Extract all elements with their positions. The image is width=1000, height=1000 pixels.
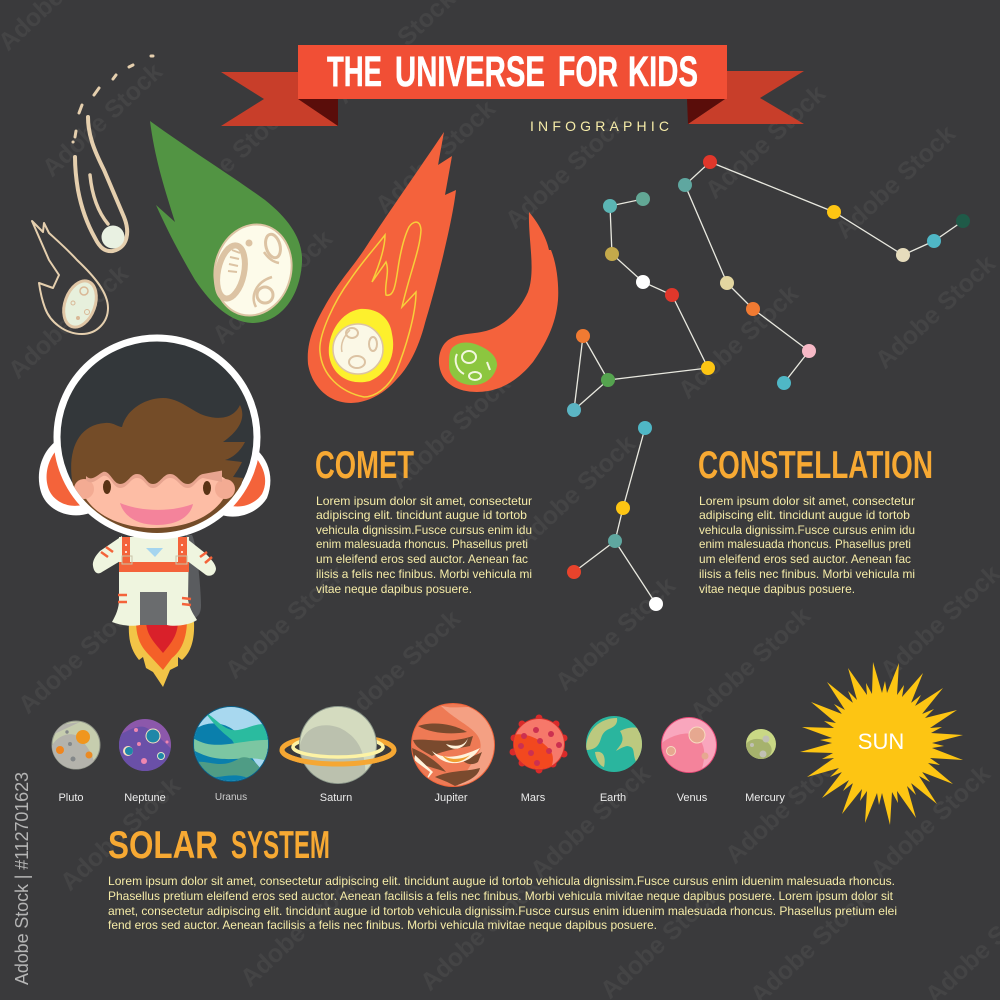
text: Adobe Stock xyxy=(550,572,681,696)
helmet xyxy=(57,338,257,536)
text: Adobe Stock xyxy=(37,58,168,182)
text block: comet: enim malesuada rhoncus. Phasellus preti xyxy=(316,537,528,551)
icon: sun xyxy=(800,662,963,825)
planet labels xyxy=(58,792,785,804)
title: FOR xyxy=(558,48,618,96)
text block: comet: adipiscing elit. tincidunt augue id tortob xyxy=(316,508,527,522)
text block: comet: vitae neque dapibus posuere. xyxy=(316,582,472,596)
text: Adobe Stock xyxy=(3,260,134,384)
heading: solar system: SOLAR xyxy=(108,824,218,867)
text block: constellation: ilisis a felis nec finibus. Morbi vehicula mi xyxy=(699,567,915,581)
text block: solar system xyxy=(108,874,897,932)
text: Adobe Stock xyxy=(55,772,186,896)
icon: big orange comet xyxy=(308,132,456,403)
title: UNIVERSE xyxy=(395,48,545,96)
head xyxy=(71,398,245,534)
planet labels: Earth xyxy=(600,792,626,804)
icon: curved orange comet xyxy=(439,212,558,392)
flame xyxy=(129,620,194,687)
text block: comet: ilisis a felis nec finibus. Morbi vehicula mi xyxy=(316,567,532,581)
planet labels: Mars xyxy=(521,792,546,804)
planet: Venus xyxy=(660,717,717,775)
text block: constellation: vehicula dignissim.Fusce cursus enim idu xyxy=(699,523,915,537)
text: Adobe Stock xyxy=(720,745,851,869)
text: Adobe Stock xyxy=(500,110,631,234)
planet: Mars xyxy=(510,714,568,775)
planet labels: Pluto xyxy=(58,792,84,804)
text: Adobe Stock xyxy=(220,560,351,684)
planet labels: Saturn xyxy=(320,792,352,804)
watermark credit: Adobe Stock | #112701623 xyxy=(12,772,32,985)
text: Adobe Stock xyxy=(685,602,816,726)
planet: Neptune xyxy=(119,719,172,775)
text: Adobe Stock xyxy=(700,80,831,204)
text: Adobe Stock xyxy=(335,605,466,729)
text: Adobe Stock xyxy=(13,595,144,719)
astronaut kid xyxy=(39,338,270,687)
text block: solar system: Lorem ipsum dolor sit amet, consectetur adipiscing elit. tincidunt augue id tortob vehicula dignissim.Fusce cursus enim iduenim malesuada rhoncus. xyxy=(108,874,895,888)
heading: comet: COMET xyxy=(315,444,414,487)
icon: white streak comet with dashed trail xyxy=(73,56,153,251)
text block: constellation xyxy=(699,494,915,596)
subtitle: INFOGRAPHIC xyxy=(530,118,669,134)
planet labels: Mercury xyxy=(745,792,785,804)
text: Adobe Stock xyxy=(207,225,338,349)
text: Adobe Stock xyxy=(830,120,961,244)
planet: Mercury xyxy=(746,729,776,760)
text: Adobe Stock xyxy=(385,370,516,494)
face xyxy=(80,474,230,528)
text: Adobe Stock xyxy=(415,872,546,996)
icon: green comet xyxy=(150,121,302,324)
text block: solar system: fend eros sed auctor. Aenean facilisis a felis nec finibus. Morbi vehicula mivitae neque dapibus posuere. xyxy=(108,918,657,932)
icon: sun: SUN xyxy=(858,729,904,754)
text: Adobe Stock xyxy=(235,868,366,992)
text block: constellation: Lorem ipsum dolor sit amet, consectetur xyxy=(699,494,915,508)
planet labels: Venus xyxy=(677,792,708,804)
planet labels: Neptune xyxy=(124,792,166,804)
planet: Earth xyxy=(586,716,646,772)
icon: outlined small comet xyxy=(32,221,108,334)
planet: Jupiter xyxy=(411,703,495,787)
text block: comet: um eleifend eros sed auctor. Aenean fac xyxy=(316,552,528,566)
text block: solar system: Phasellus pretium eleifend eros sed auctor. Aenean facilisis a felis nec finibus. Morbi vehicula mivitae neque dapibus posuere. Lorem ipsum dolor sit xyxy=(108,889,894,903)
text block: constellation: um eleifend eros sed auctor. Aenean fac xyxy=(699,552,911,566)
constellation: bottom xyxy=(567,421,663,611)
text block: constellation: vitae neque dapibus posuere. xyxy=(699,582,855,596)
text: Adobe Stock xyxy=(673,280,804,404)
title: KIDS xyxy=(628,48,698,96)
text: Adobe Stock xyxy=(525,760,656,884)
text block: comet: vehicula dignissim.Fusce cursus enim idu xyxy=(316,523,532,537)
planet labels: Uranus xyxy=(215,792,247,803)
helmet ears xyxy=(39,430,270,517)
planet: Pluto xyxy=(52,720,100,770)
text: Adobe Stock xyxy=(165,98,296,222)
text: Adobe Stock xyxy=(870,250,1000,374)
eyes xyxy=(103,480,111,494)
title xyxy=(327,48,698,96)
planet: Uranus xyxy=(193,706,269,782)
planet labels: Jupiter xyxy=(434,792,468,804)
mouth xyxy=(120,503,193,525)
text block: constellation: enim malesuada rhoncus. Phasellus preti xyxy=(699,537,911,551)
title ribbon xyxy=(221,45,804,126)
planet: Saturn xyxy=(282,706,394,790)
constellation: left xyxy=(567,192,715,417)
jetpack xyxy=(186,535,201,620)
heading: solar system: SYSTEM xyxy=(231,824,330,867)
text: Adobe Stock xyxy=(865,760,996,884)
constellation: right xyxy=(678,155,970,390)
constellations xyxy=(567,155,970,611)
text: Adobe Stock xyxy=(510,430,641,554)
text block: comet xyxy=(316,494,532,596)
hair xyxy=(71,398,245,534)
text block: comet: Lorem ipsum dolor sit amet, consectetur xyxy=(316,494,532,508)
text block: solar system: amet, consectetur adipiscing elit. tincidunt augue id tortob vehicula dignissim.Fusce cursus enim iduenim malesuada rhoncus. Phasellus pretium elei xyxy=(108,904,897,918)
text block: constellation: adipiscing elit. tincidunt augue id tortob xyxy=(699,508,910,522)
spacesuit xyxy=(93,536,216,626)
title: THE xyxy=(327,48,382,96)
heading: solar system xyxy=(108,824,330,867)
text: Adobe Stock xyxy=(370,95,501,219)
